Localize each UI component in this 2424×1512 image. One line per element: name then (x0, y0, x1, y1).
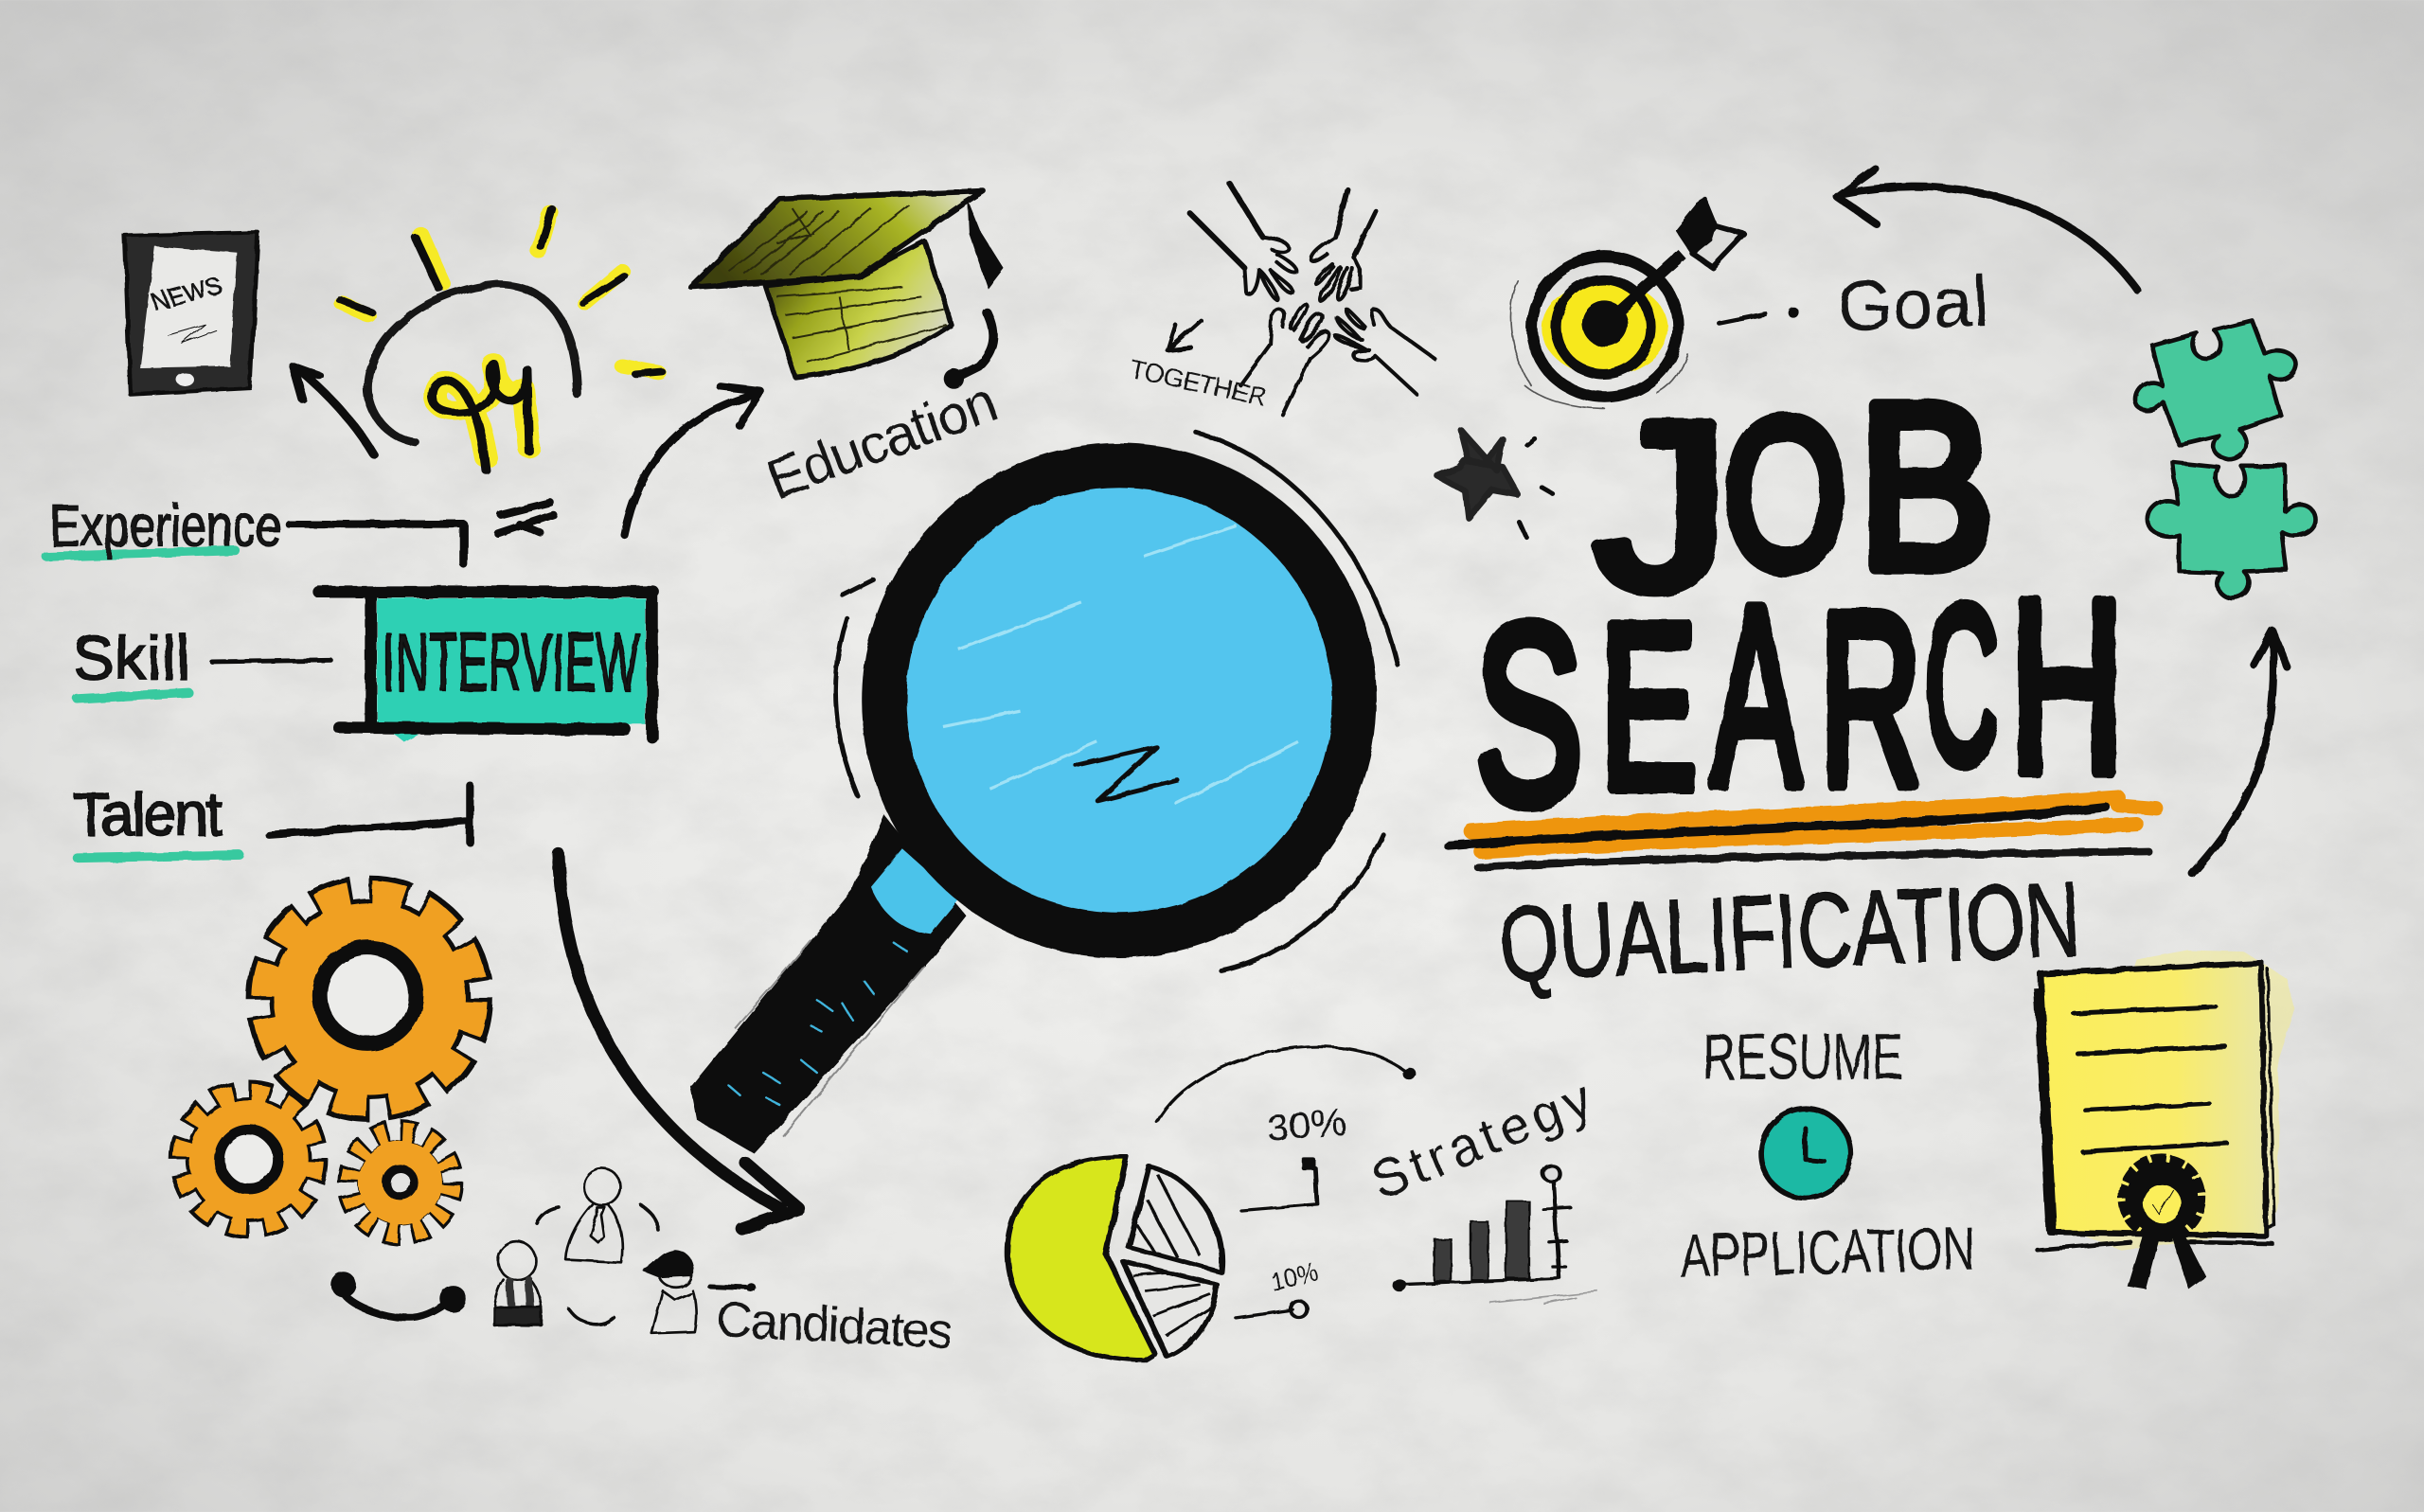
icon: target with arrow (1510, 198, 1744, 409)
label: Goal (1720, 261, 1990, 347)
handle (691, 814, 966, 1153)
label: RESUME: RESUME (1702, 1021, 1903, 1094)
icon: graduation cap (691, 191, 1004, 389)
icon: light bulb with rays and news arrow (294, 208, 662, 471)
magnifying glass (691, 433, 1398, 1153)
title: JOB (1595, 354, 1994, 638)
connector arc (1157, 1047, 1408, 1122)
marks under bulb (498, 503, 553, 533)
icon: candidates (332, 1168, 696, 1333)
label: Experience: Experience (49, 493, 281, 559)
title: SEARCH: R (1820, 562, 1921, 837)
arrow: top curved (1837, 169, 2138, 291)
label: Skill: Skill (73, 623, 190, 692)
label: 10 percent: 10% (1268, 1256, 1322, 1299)
icon: clock (1761, 1109, 1850, 1198)
label: Education: Education (759, 371, 1006, 511)
title: SEARCH (1475, 550, 2124, 857)
icon: puzzle pieces (2135, 321, 2315, 598)
chart group: pie and strategy (1007, 1047, 1598, 1361)
connector: skill (212, 660, 330, 662)
bar chart (1435, 1201, 1529, 1282)
title: JOB: O (1723, 374, 1847, 613)
connector: talent (269, 786, 470, 843)
box: INTERVIEW (319, 592, 653, 742)
title: SEARCH: A (1711, 555, 1802, 838)
title: JOB: J (1595, 374, 1728, 638)
title: SEARCH: H (2009, 550, 2124, 825)
arrow: to education (625, 386, 760, 535)
label: TOGETHER: TOGETHER (1128, 354, 1270, 412)
connector 30 percent (1241, 1167, 1317, 1210)
arrow: interview to candidates (558, 853, 799, 1229)
connector: candidates (709, 1283, 756, 1292)
medium gear (181, 1092, 317, 1227)
pie chart (1007, 1157, 1221, 1361)
small gear (349, 1131, 452, 1234)
icon: gears (181, 892, 476, 1234)
label: 30 percent: 30% (1265, 1102, 1348, 1149)
label: Goal: Goal (1836, 261, 1990, 347)
heading: QUALIFICATION: QUALIFICATION (1497, 860, 2083, 1003)
box: INTERVIEW: INTERVIEW (383, 616, 640, 709)
underline: orange stroke (1449, 798, 2157, 867)
title: SEARCH: S (1475, 572, 1583, 857)
icon: news tablet: NEWS (148, 273, 226, 317)
big gear (263, 892, 476, 1105)
connector 10 percent (1236, 1310, 1292, 1318)
connector: experience (289, 525, 464, 564)
icon: star (1437, 430, 1552, 537)
label: APPLICATION: APPLICATION (1679, 1214, 1976, 1290)
icon: news tablet (125, 232, 258, 395)
title: SEARCH: E (1600, 577, 1698, 837)
icon: hands together (1167, 183, 1435, 415)
label: Candidates: Candidates (715, 1292, 954, 1360)
label: Strategy: Strategy (1363, 1069, 1600, 1210)
arrow: right upward (2192, 631, 2288, 874)
title: JOB: B (1858, 354, 1994, 617)
title: SEARCH: C (1925, 560, 1999, 810)
icon: certificate (2038, 951, 2294, 1290)
label: Talent: Talent (73, 781, 223, 848)
